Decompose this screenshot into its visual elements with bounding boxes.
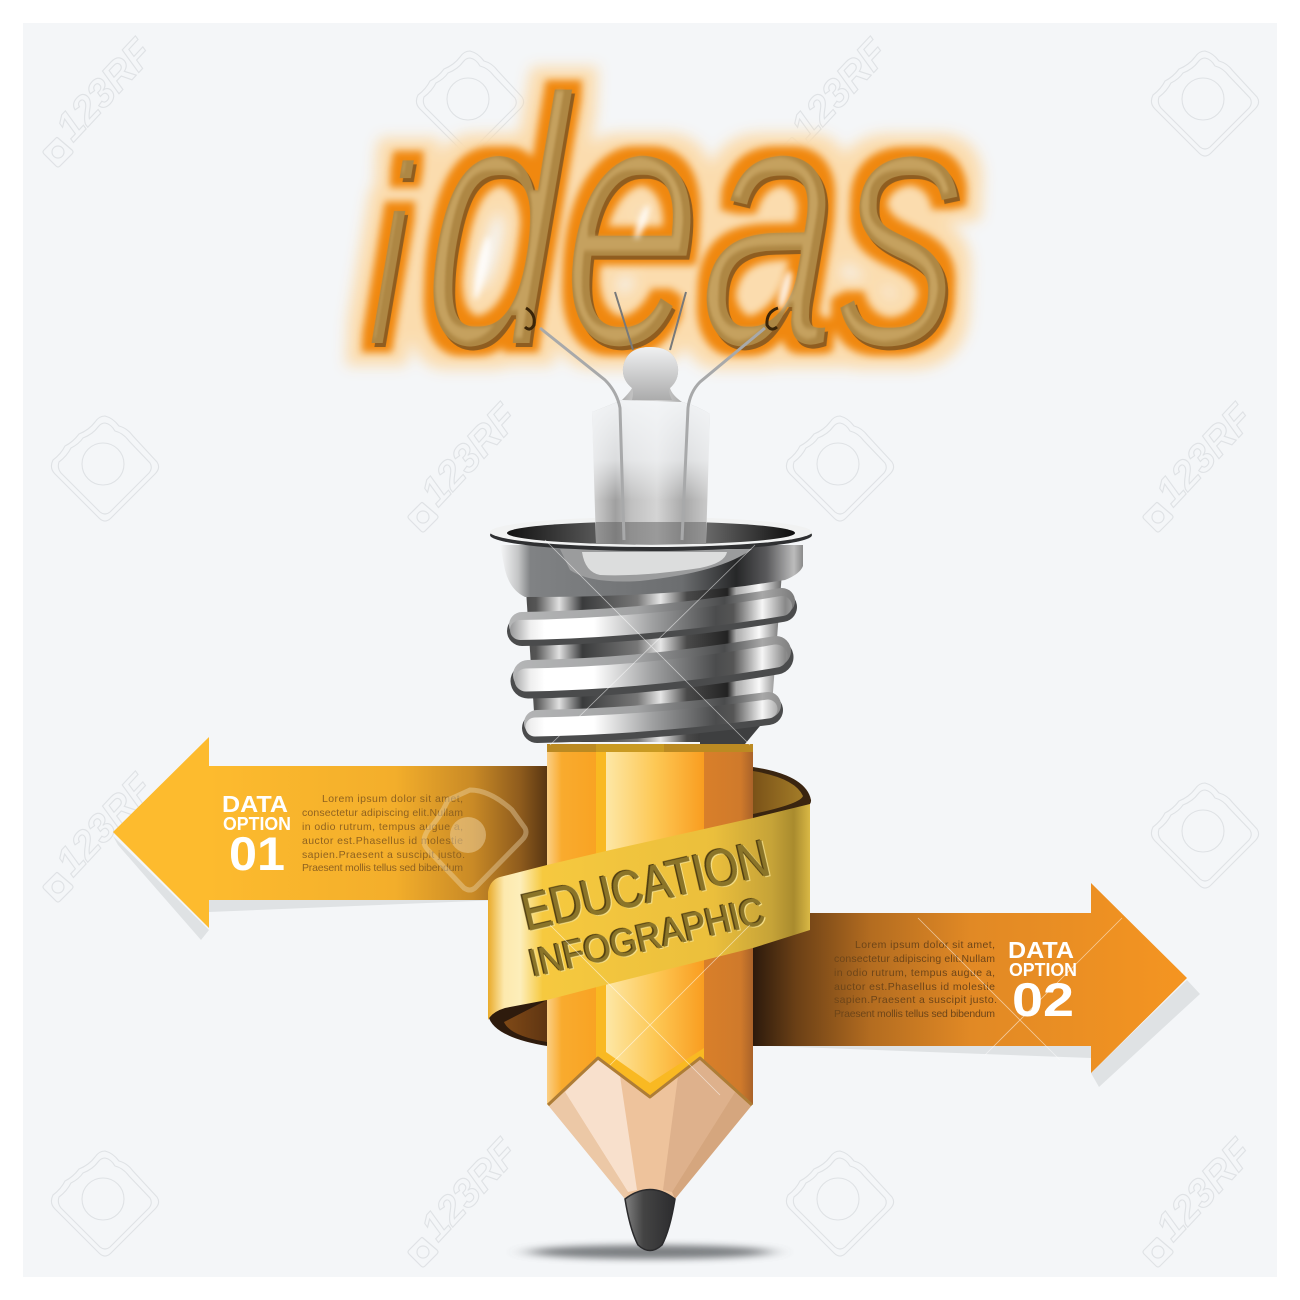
thread band 2 [526,651,776,681]
watermark pattern: 123RF [412,395,528,514]
arrow shadow [770,980,1200,1087]
arrow body [113,737,547,928]
paragraph: auctor est.Phasellus id molestie [302,835,463,847]
watermark pattern: 123RF [782,30,898,149]
paragraph [834,939,997,1020]
ribbon back: lower left [488,990,547,1046]
arrow: data option 02: 02 [1012,973,1074,1026]
paragraph [302,793,465,874]
pencil shaft facets [547,744,753,1105]
upper thin wires [615,292,686,350]
label: DATA [222,791,288,817]
neck highlight [560,549,752,582]
socket bottom taper [700,714,770,744]
watermark pattern: 123RF [1147,1130,1263,1249]
arrow shadow [113,836,500,940]
paragraph: Praesent mollis tellus sed bibendum [302,862,463,874]
paragraph: in odio rutrum, tempus augue a, [302,821,463,833]
ribbon band [488,804,810,1020]
ground shadow [528,1245,772,1259]
paragraph: consectetur adipiscing elit.Nullam [834,953,995,965]
stem highlight fade [592,400,710,500]
lamp socket [490,517,812,744]
counter glow highlights [470,204,795,311]
heading line 1: EDUCATION [517,829,775,943]
watermark pattern: 123RF [1147,395,1263,514]
paragraph: Lorem ipsum dolor sit amet, [322,793,463,805]
ribbon front: education infographic [488,804,810,1020]
watermark pattern: 123RF [412,1130,528,1249]
pencil [547,744,753,1250]
arrow: data option 01: 01 [229,827,285,880]
ferrule band [547,744,753,752]
thread band 3 [535,705,768,728]
ribbon back: upper right [753,767,811,824]
arrow: data option 01 [113,737,547,940]
paragraph: consectetur adipiscing elit.Nullam [302,807,463,819]
glowing word: ideas: ideas [363,23,971,420]
arrow: data option 02: OPTION [1009,960,1077,980]
socket rim [490,517,812,551]
arrow: data option 01: OPTION [223,814,291,834]
paragraph: Praesent mollis tellus sed bibendum [834,1008,995,1020]
heading line 2: INFOGRAPHIC [525,890,769,986]
neck [500,545,803,597]
pencil wood tip [548,1058,752,1199]
stem head [623,347,678,400]
label: DATA [1008,937,1074,963]
paragraph: sapien.Praesent a suscipit justo. [302,849,465,861]
arrow body [753,883,1187,1073]
thread band 1 [520,601,782,631]
hook: right [767,308,778,329]
support wires [540,328,765,540]
watermark pattern: 123RF [47,765,163,884]
paragraph: auctor est.Phasellus id molestie [834,981,995,993]
watermark cross lines [545,540,1122,1095]
graphite tip [625,1190,675,1250]
arrow: data option 02 [753,883,1200,1087]
stem dark overlap [596,522,706,544]
thread core [526,572,782,742]
zigzag edge [548,1058,752,1105]
watermark on arrow [424,790,526,890]
paragraph: sapien.Praesent a suscipit justo. [834,994,997,1006]
hook: left [525,308,534,329]
glass stem [592,347,710,544]
paragraph: Lorem ipsum dolor sit amet, [855,939,995,951]
paragraph: in odio rutrum, tempus augue a, [834,967,995,979]
neck highlight inner [582,552,727,575]
watermark pattern: 123RF [47,30,163,149]
filament and support wires [525,292,778,544]
